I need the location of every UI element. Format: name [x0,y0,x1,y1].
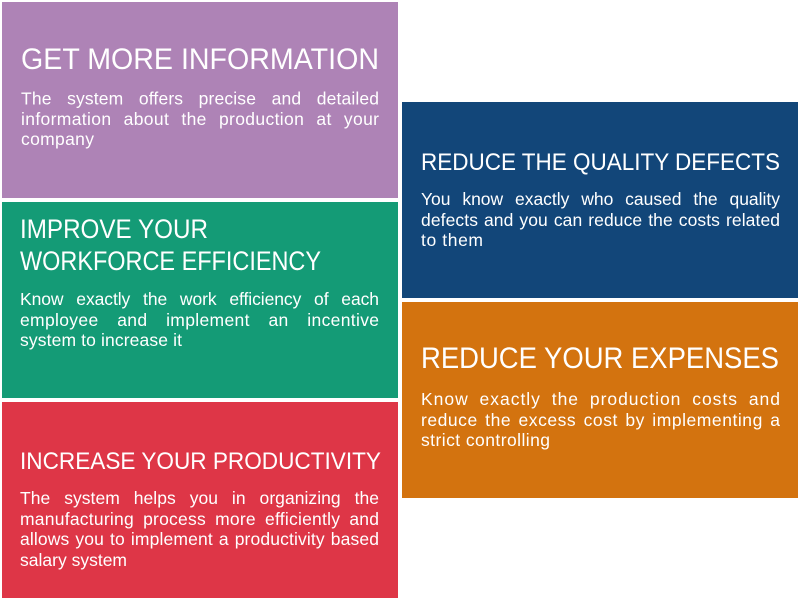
panel: reduce your expenses [402,302,798,498]
text block: increase your productivity: manufacturing process more efficiently and [20,509,379,529]
text block: get more information: The system offers precise and detailed [21,88,379,108]
heading: improve your workforce efficiency [20,214,321,276]
text block: get more information [21,88,379,149]
heading: reduce the quality defects: REDUCE THE QUALITY DEFECTS [421,149,780,176]
text block: reduce your expenses: reduce the excess cost by implementing a [421,410,780,430]
panel: improve your workforce efficiency [2,202,398,398]
text block: increase your productivity: allows you to implement a productivity based [20,529,379,549]
text block: reduce your expenses: Know exactly the production costs and [421,389,780,409]
text block: improve your workforce efficiency: Know exactly the work efficiency of each [20,289,379,309]
text block: increase your productivity [20,488,379,570]
text block: reduce the quality defects [421,189,780,250]
text block: get more information: company [21,129,94,149]
heading: increase your productivity: INCREASE YOUR PRODUCTIVITY [20,448,381,475]
heading: improve your workforce efficiency: IMPROVE YOUR [20,214,208,244]
text block: improve your workforce efficiency: system to increase it [20,330,182,350]
heading: improve your workforce efficiency: WORKFORCE EFFICIENCY [20,246,321,276]
text block: reduce the quality defects: defects and you can reduce the costs related [421,210,780,230]
text block: improve your workforce efficiency [20,289,379,350]
panel: get more information [2,2,398,198]
text block: get more information: information about the production at your [21,109,379,129]
text block: reduce the quality defects: to them [421,230,483,250]
text block: improve your workforce efficiency: employee and implement an incentive [20,310,379,330]
text block: reduce your expenses: strict controlling [421,430,550,450]
panel: reduce the quality defects [402,102,798,298]
text block: increase your productivity: The system helps you in organizing the [20,488,379,508]
panel: increase your productivity [2,402,398,598]
text block: reduce your expenses [421,389,780,450]
heading: get more information: GET MORE INFORMATION [21,43,379,76]
text block: reduce the quality defects: You know exactly who caused the quality [421,189,780,209]
text block: increase your productivity: salary system [20,550,127,570]
heading: reduce your expenses: REDUCE YOUR EXPENSES [421,342,779,375]
